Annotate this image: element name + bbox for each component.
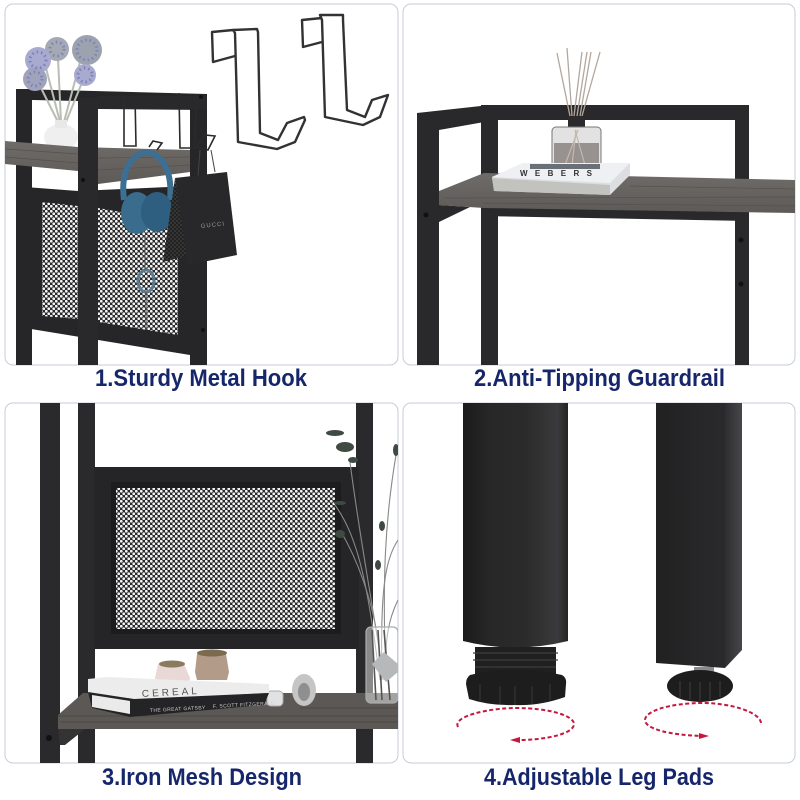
panel: anti-tipping guardrail — [403, 4, 795, 365]
caption: adjustable leg pads: 4.Adjustable Leg Pads — [484, 764, 714, 791]
caption: anti-tipping guardrail: 2.Anti-Tipping Guardrail — [474, 365, 725, 392]
shelf — [5, 141, 190, 184]
frame: back rails — [16, 89, 207, 365]
glass vase — [366, 627, 398, 703]
screws — [424, 212, 744, 286]
hooks on rail — [124, 93, 215, 176]
round foot pad — [466, 670, 566, 705]
books — [88, 677, 275, 717]
brand text: GUCCI — [201, 221, 225, 230]
title: cereal: CEREAL — [142, 686, 200, 700]
title: great gatsby: THE GREAT GATSBY — [150, 705, 206, 714]
caption: sturdy metal hook: 1.Sturdy Metal Hook — [95, 365, 308, 392]
reeds — [557, 48, 600, 116]
icon: large hook — [212, 29, 305, 149]
caption: iron mesh design: 3.Iron Mesh Design — [102, 764, 302, 791]
frame: front upright — [78, 101, 98, 365]
small glass — [267, 691, 283, 706]
mesh frame — [25, 186, 190, 355]
frame: guardrail — [417, 105, 749, 365]
book — [492, 163, 630, 195]
candle holder — [292, 674, 316, 706]
shelf — [58, 693, 398, 745]
mesh panel — [94, 467, 359, 649]
panel: iron mesh design — [5, 403, 399, 763]
threaded collar — [473, 647, 558, 677]
icon: second hook — [302, 15, 388, 125]
gift bag — [175, 172, 237, 265]
book title: WEBERS — [520, 169, 593, 178]
square foot pad — [667, 670, 733, 702]
ceramics — [155, 650, 229, 682]
screws — [81, 95, 205, 332]
reed diffuser — [552, 48, 601, 168]
icon: headphones — [121, 153, 173, 330]
icon: vase with flowers — [23, 35, 102, 150]
rotation arrow: left — [457, 708, 574, 743]
square leg — [656, 403, 742, 702]
screw — [46, 735, 52, 741]
shelf — [439, 173, 795, 213]
mesh bag — [163, 178, 187, 262]
bolt — [694, 667, 714, 672]
rotation arrow: right — [645, 703, 761, 739]
round leg — [463, 403, 568, 705]
plant — [326, 430, 399, 680]
frame uprights — [40, 403, 373, 763]
author: F. SCOTT FITZGERALD — [213, 701, 275, 710]
panel: adjustable leg pads — [403, 403, 795, 763]
panel: sturdy metal hook — [5, 4, 398, 365]
